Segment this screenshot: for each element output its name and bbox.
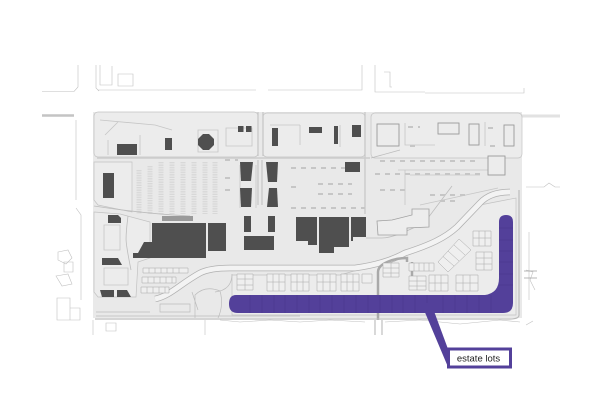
- surrounding context linework: [42, 65, 560, 335]
- callout label: estate lots: estate lots: [457, 354, 500, 364]
- parking islands: [225, 127, 500, 208]
- road extensions: [42, 116, 560, 335]
- callout arrow: [421, 303, 448, 367]
- loading canopy: [162, 216, 193, 221]
- curved access road: [94, 112, 519, 320]
- site ground plane: [93, 112, 522, 318]
- interior driveways: [100, 120, 500, 285]
- building: round pavilion: [198, 134, 214, 150]
- building: main anchor store: [133, 223, 206, 258]
- pond and park curves: [96, 274, 300, 318]
- outlined retail building: [377, 209, 429, 235]
- estate lots purple strip: [229, 215, 513, 313]
- development blocks: [94, 112, 522, 315]
- callout label: estate lots: [448, 349, 510, 367]
- dark buildings: [100, 125, 366, 297]
- residential lot grids: [141, 231, 492, 293]
- building: northwest pad: [117, 144, 137, 155]
- parking lots centre: [139, 162, 215, 214]
- outlined future buildings: [377, 123, 514, 175]
